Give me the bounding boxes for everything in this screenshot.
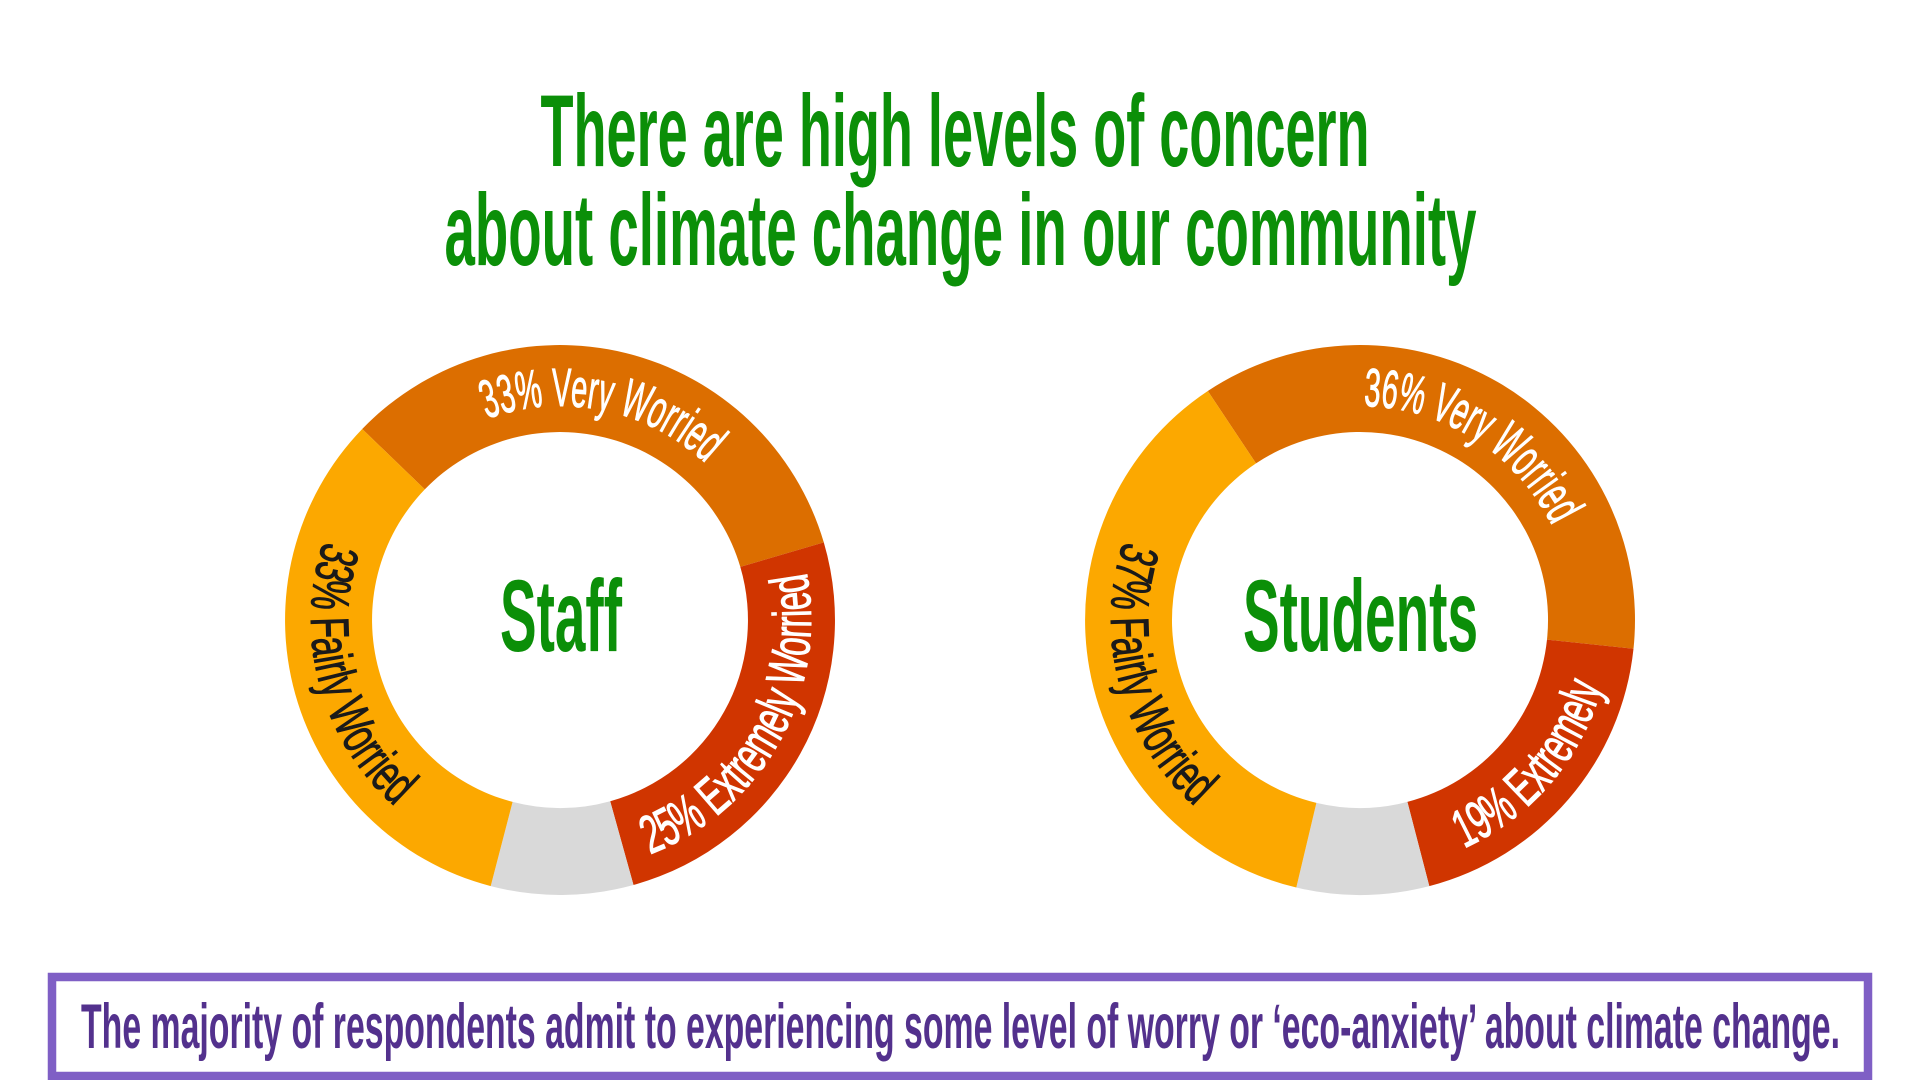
label: 33% very worried: 33% Very Worried — [478, 368, 730, 463]
center label: staff: Staff — [500, 559, 623, 673]
segment: students extremely worried — [1407, 640, 1634, 886]
callout box — [52, 977, 1868, 1076]
donut chart: staff — [285, 345, 835, 895]
label: 36% very worried: 36% Very Worried — [1364, 368, 1586, 525]
segment: staff very worried — [362, 345, 824, 567]
segment: staff not worried — [491, 801, 634, 895]
title — [444, 74, 1477, 287]
donut chart: students — [1085, 345, 1635, 896]
segment: students fairly worried — [1085, 391, 1316, 888]
segment: staff fairly worried — [285, 429, 513, 886]
label: 33% fairly worried: 33% Fairly Worried — [308, 544, 421, 806]
segment: students very worried — [1208, 345, 1635, 649]
callout frame — [52, 977, 1868, 1076]
segment: staff extremely worried — [610, 542, 835, 885]
label: 37% fairly worried: 37% Fairly Worried — [1108, 544, 1221, 806]
label: 19% extremely: 19% Extremely — [1452, 677, 1610, 848]
label: 25% extremely worried: 25% Extremely Worried — [639, 574, 812, 854]
center label: students: Students — [1243, 559, 1478, 673]
segment: students not worried — [1296, 802, 1429, 895]
